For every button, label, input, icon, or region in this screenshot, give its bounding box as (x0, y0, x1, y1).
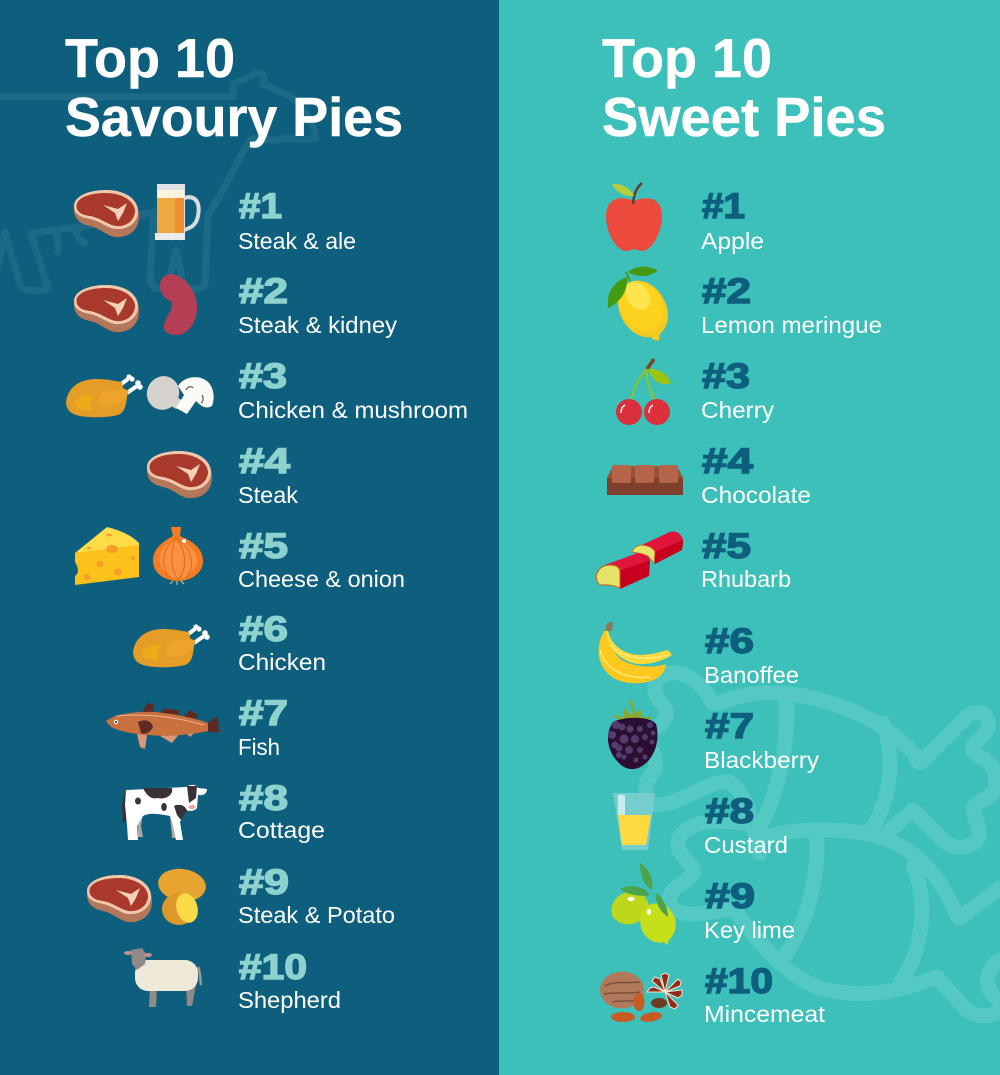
rank and label: steak and ale (238, 187, 356, 254)
icon: chicken (133, 624, 210, 667)
icon: mushrooms (141, 371, 214, 415)
icon: bananas (599, 622, 672, 683)
rank and label: cottage: Cottage (238, 817, 325, 843)
rank and label: chicken and mushroom: Chicken & mushroom (238, 397, 468, 423)
rank and label: lemon meringue (701, 272, 882, 338)
icon: beer mug (155, 184, 199, 240)
icon: cherries (616, 359, 671, 425)
rank and label: rhubarb: #5 (702, 527, 751, 566)
rank and label: custard (704, 792, 788, 858)
panel background: turquoise (499, 0, 1000, 1075)
rank and label: steak and potato: Steak & Potato (238, 902, 395, 928)
icon: steak (74, 285, 139, 332)
icon: blackberry (608, 700, 658, 769)
icon: walnut, star anise and raisins (600, 972, 682, 1023)
icon: apple (606, 183, 662, 251)
icon: kidney (160, 274, 197, 335)
icon: key limes (607, 863, 681, 948)
rank and label: chocolate: Chocolate (701, 482, 811, 508)
rank and label: fish: #7 (239, 694, 288, 733)
rank and label: steak and potato (238, 863, 395, 928)
rank and label: banoffee: #6 (705, 622, 754, 661)
rank and label: mincemeat: Mincemeat (704, 1001, 826, 1027)
rank and label: shepherd: Shepherd (238, 987, 341, 1013)
panel: sweet pies (499, 0, 1000, 1075)
rank and label: steak and ale: Steak & ale (238, 228, 356, 254)
rank and label: chicken and mushroom (238, 357, 468, 423)
rank and label: key lime (704, 877, 795, 943)
rank and label: chicken: Chicken (238, 649, 326, 675)
icon: cheese wedge (75, 527, 139, 585)
rank and label: lemon meringue: Lemon meringue (701, 312, 882, 338)
rank and label: rhubarb (701, 527, 791, 592)
heading: Top 10 Savoury Pies: Top 10 (65, 27, 235, 89)
rank and label: steak: Steak (238, 482, 298, 508)
heading: Top 10 Sweet Pies: Top 10 (602, 27, 772, 89)
watermark: cow outline (0, 73, 316, 291)
rank and label: blackberry: #7 (705, 707, 754, 746)
rank and label: apple: Apple (701, 228, 764, 254)
rank and label: steak: #4 (239, 442, 291, 481)
heading: Top 10 Savoury Pies (65, 27, 403, 148)
icon: steak (87, 875, 152, 922)
rank and label: cottage: #8 (239, 779, 288, 818)
rank and label: custard: Custard (704, 832, 788, 858)
rank and label: blackberry: Blackberry (704, 747, 820, 773)
rank and label: apple (701, 187, 764, 254)
rank and label: cherry: #3 (702, 357, 750, 396)
rank and label: cheese and onion: #5 (239, 527, 288, 566)
rank and label: cottage (238, 779, 325, 843)
rank and label: chicken: #6 (239, 610, 288, 649)
rank and label: mincemeat (704, 962, 826, 1027)
icon: potatoes (156, 866, 208, 925)
rank and label: steak and ale: #1 (239, 187, 282, 226)
rank and label: chocolate (701, 442, 811, 508)
rank and label: chicken and mushroom: #3 (239, 357, 287, 396)
rank and label: chicken (238, 610, 326, 675)
icon: cow (122, 785, 207, 840)
rank and label: lemon meringue: #2 (702, 272, 751, 311)
rank and label: steak and kidney: #2 (239, 272, 288, 311)
icon: steak (147, 451, 212, 498)
rank and label: apple: #1 (702, 187, 745, 226)
icon: sheep (124, 948, 201, 1007)
icon: chocolate bar (607, 465, 683, 495)
icon: steak (74, 190, 139, 237)
icon: chicken (66, 374, 143, 417)
icon: glass of custard (613, 793, 655, 850)
rank and label: key lime: #9 (705, 877, 755, 916)
rank and label: chocolate: #4 (702, 442, 754, 481)
rank and label: steak (238, 442, 298, 508)
rank and label: cherry (701, 357, 775, 423)
panel: savoury pies (0, 0, 499, 1075)
rank and label: banoffee: Banoffee (704, 662, 799, 688)
rank and label: cheese and onion: Cheese & onion (238, 566, 405, 592)
icon: lemon (608, 267, 678, 346)
icon: rhubarb (596, 532, 683, 589)
rank and label: steak and potato: #9 (239, 863, 289, 902)
heading: Top 10 Savoury Pies: Savoury Pies (65, 86, 403, 148)
icon: fish (106, 703, 219, 749)
rank and label: steak and kidney: Steak & kidney (238, 312, 398, 338)
rank and label: custard: #8 (705, 792, 754, 831)
rank and label: shepherd: #10 (239, 948, 307, 987)
rank and label: fish (238, 694, 288, 760)
rank and label: steak and kidney (238, 272, 398, 338)
icon: onion (153, 527, 203, 585)
rank and label: cheese and onion (238, 527, 405, 592)
rank and label: blackberry (704, 707, 820, 773)
rank and label: mincemeat: #10 (705, 962, 773, 1001)
panel background: dark teal (0, 0, 499, 1075)
heading: Top 10 Sweet Pies: Sweet Pies (602, 86, 886, 148)
watermark: wrapped candies (645, 673, 1000, 1016)
rank and label: banoffee (704, 622, 799, 688)
rank and label: shepherd (238, 948, 341, 1013)
rank and label: fish: Fish (238, 734, 280, 760)
rank and label: rhubarb: Rhubarb (701, 566, 791, 592)
heading: Top 10 Sweet Pies (602, 27, 886, 148)
rank and label: cherry: Cherry (701, 397, 775, 423)
rank and label: key lime: Key lime (704, 917, 795, 943)
